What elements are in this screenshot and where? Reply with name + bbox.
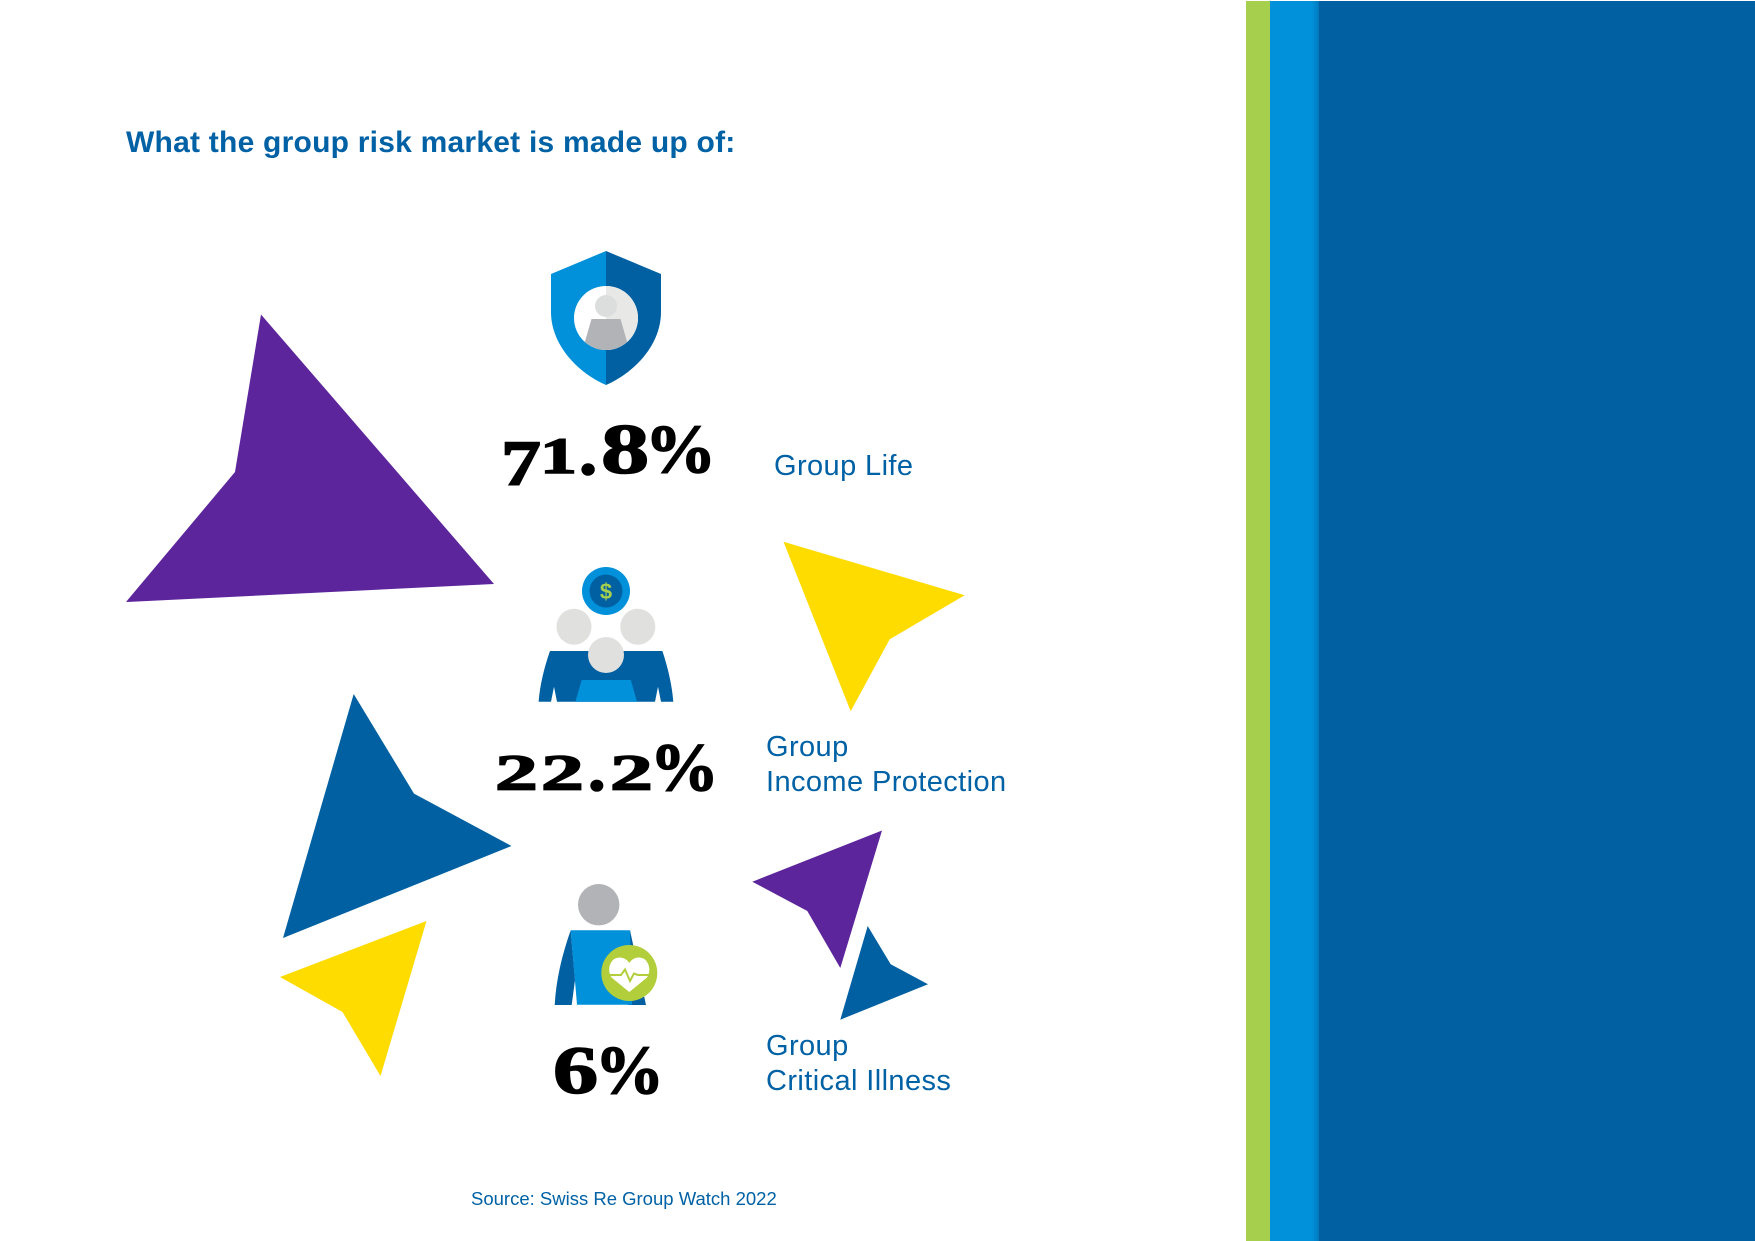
decorative arrow: dark blue left — [283, 694, 512, 938]
number: 22.2%: . — [588, 732, 606, 805]
label: Group Income Protection: Group — [766, 731, 849, 763]
band: light blue stripe — [1270, 1, 1319, 1241]
source note: Source: Swiss Re Group Watch 2022 — [471, 1188, 777, 1209]
band: dark blue panel — [1319, 1, 1755, 1241]
label: Group Life: Group Life — [774, 450, 913, 482]
number: 71.8%: 8 — [601, 411, 649, 489]
decorative arrow: dark blue lower right — [840, 926, 928, 1020]
number: 22.2%: 2 — [541, 746, 584, 802]
label: Group Critical Illness: Group — [766, 1030, 849, 1062]
number: 71.8%: 7 — [501, 428, 541, 500]
decorative arrow: yellow upper right — [784, 542, 965, 712]
number: 22.2%: 2 — [495, 746, 538, 802]
decorative arrow: large purple — [126, 314, 494, 602]
number: 22.2%: 2 — [610, 746, 652, 802]
number: 22.2% — [495, 728, 719, 805]
icon: group with dollar coin: $ — [600, 579, 612, 604]
decorative arrow: yellow lower left — [280, 921, 426, 1076]
label: Group Critical Illness: Critical Illness — [766, 1065, 951, 1097]
label: Group Income Protection — [766, 731, 1007, 798]
label: Group Income Protection: Income Protection — [766, 766, 1007, 798]
icon: person with heart badge — [554, 884, 658, 1005]
number: 6%: % — [595, 1032, 664, 1108]
number: 71.8% — [501, 411, 716, 500]
icon: shield with person — [551, 251, 661, 385]
number: 71.8%: . — [578, 413, 597, 489]
panel: right colour bands — [1246, 1, 1755, 1241]
title: What the group risk market is made up of: — [126, 126, 736, 159]
number: 71.8%: 1 — [540, 429, 577, 485]
number: 6% — [553, 1032, 664, 1108]
label: Group Critical Illness — [766, 1030, 951, 1097]
number: 71.8%: % — [645, 411, 716, 487]
band: green stripe — [1246, 1, 1270, 1241]
number: 22.2%: % — [650, 728, 719, 804]
icon: group with dollar coin — [538, 567, 674, 702]
number: 6%: 6 — [553, 1032, 598, 1108]
decorative arrow: purple lower right — [752, 830, 882, 968]
